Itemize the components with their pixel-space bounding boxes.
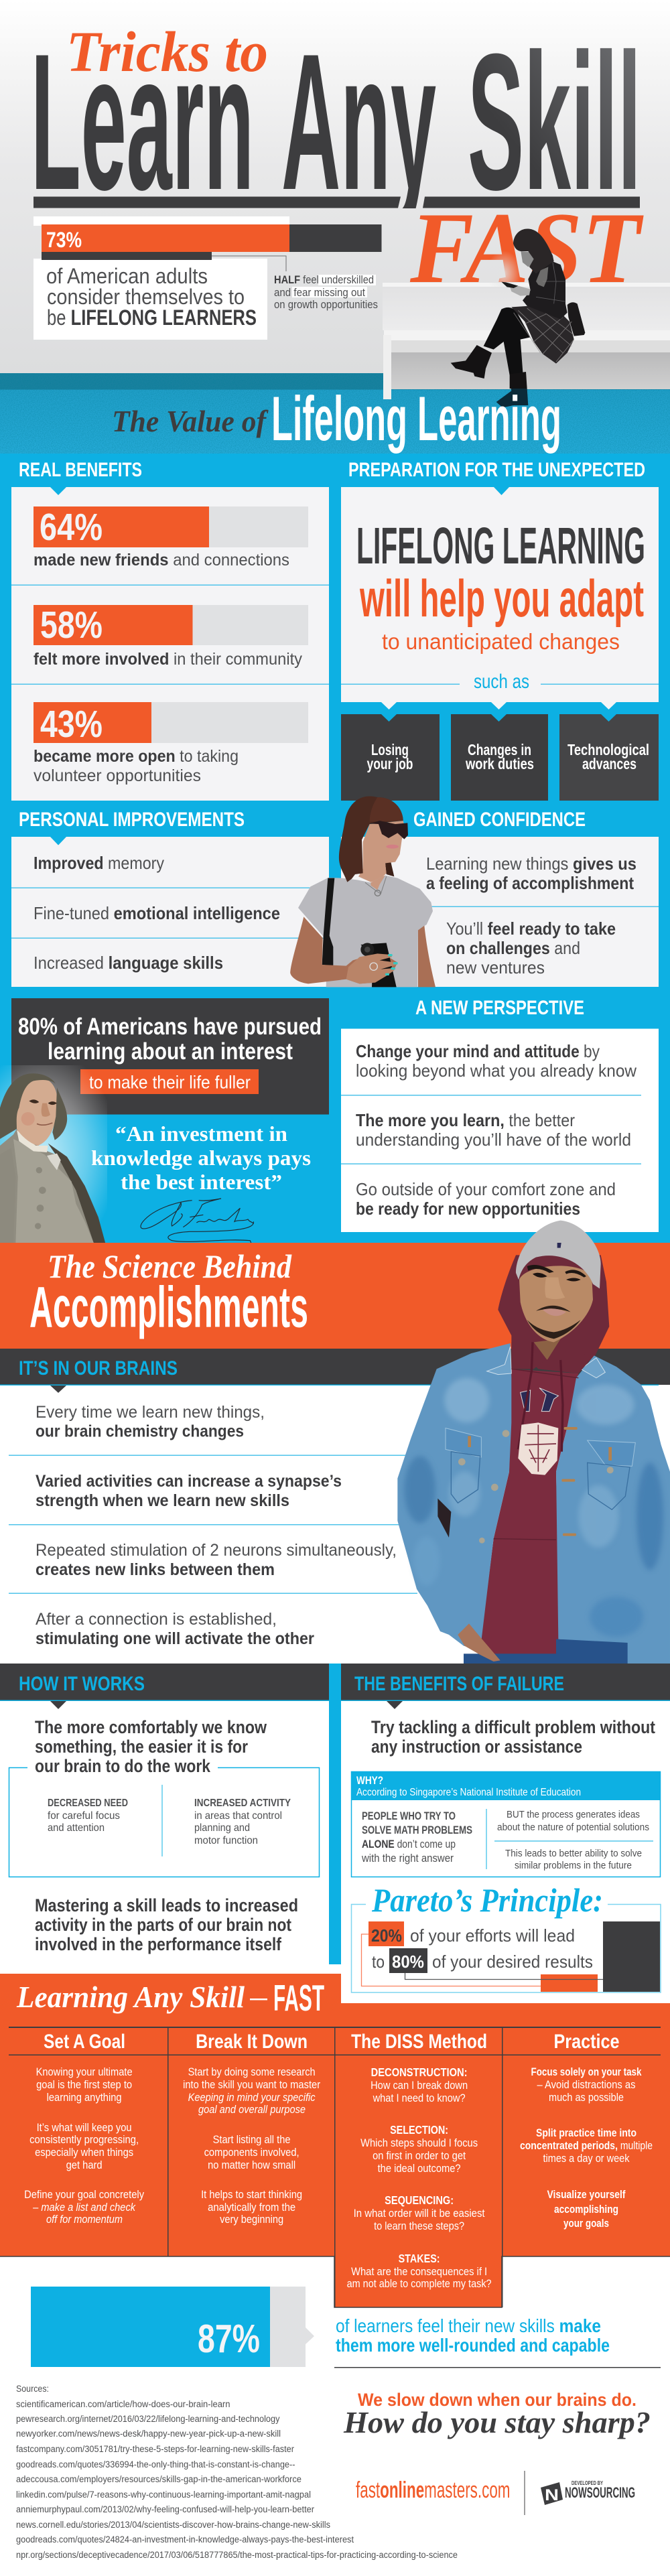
panel: decreased need and increased activity: INCREASED ACTIVITY	[194, 1798, 291, 1809]
text: Franklin quote	[91, 1122, 311, 1194]
panel: benefits of failure	[341, 1664, 670, 1992]
text: 80 percent of results	[372, 1948, 593, 1973]
column: set a goal: get hard	[66, 2159, 103, 2171]
text: 20 percent of efforts: of your efforts will lead	[410, 1925, 575, 1946]
column: practice: Split practice time into	[536, 2126, 636, 2139]
column: the DISS method: In what order will it be easiest	[354, 2207, 485, 2220]
heading: Learning Any Skill FAST: Learning Any Skill	[16, 1980, 245, 2014]
text: sources: Sources:	[16, 2383, 49, 2394]
heading: The Science Behind Accomplishments	[29, 1247, 308, 1340]
text: 80 percent of results: of your desired results	[432, 1952, 593, 1972]
column: the DISS method: SELECTION:	[390, 2123, 448, 2137]
text: comfortable knowledge: something, the easier it is for	[35, 1737, 248, 1757]
panel: why box: SOLVE MATH PROBLEMS	[362, 1824, 472, 1836]
panel: losing your job: Losing	[371, 741, 409, 758]
text: learners feel skills: of learners feel their new skills make	[336, 2315, 601, 2336]
text: 80 percent of results: to	[372, 1952, 385, 1972]
text: sources: npr.org/sections/deceptivecadence/2017/03/06/518777865/the-most-practical-tips-for-practicing-according-to-science	[16, 2550, 458, 2560]
heading: real benefits: REAL BENEFITS	[19, 459, 142, 481]
chart: 87 percent bar	[31, 2287, 314, 2367]
column: practice: Practice	[553, 2031, 619, 2053]
text: felt more involved: felt more involved in their community	[34, 650, 302, 669]
title: Learn Any Skill: Any	[281, 13, 437, 231]
panel: gained confidence: You’ll feel ready to take	[446, 919, 616, 939]
text: sources: linkedin.com/pulse/7-reasons-why-continuous-learning-important-amit-nagpal	[16, 2490, 311, 2500]
column: practice: much as possible	[549, 2091, 624, 2104]
column: break it down: Keeping in mind your specific	[188, 2091, 316, 2104]
panel: Pareto's Principle	[351, 1881, 661, 1992]
icon: NowSourcing logo	[541, 2480, 635, 2505]
text: fastonlinemasters.com: fastonlinemasters.com	[356, 2478, 511, 2503]
text: brain chemistry	[36, 1403, 265, 1441]
panel: 80 percent of Americans	[11, 998, 329, 1115]
text: lifelong learning will help you adapt: to unanticipated changes	[382, 629, 620, 654]
text: comfortable knowledge	[35, 1717, 267, 1776]
column: break it down: Start by doing some research	[188, 2065, 316, 2078]
callout: half feel underskilled	[212, 256, 378, 311]
panel: why box	[351, 1771, 661, 1877]
panel: a new perspective: Change your mind and attitude by	[356, 1041, 600, 1061]
text: mastering a skill: activity in the parts of our brain not	[35, 1915, 291, 1935]
icon: white bench	[383, 283, 670, 399]
heading: The Science Behind Accomplishments: Accomplishments	[29, 1276, 308, 1340]
panel: blue textured floor	[0, 373, 670, 454]
column: practice: times a day or week	[543, 2152, 630, 2165]
text: lifelong learning will help you adapt	[356, 517, 645, 654]
white stat box	[34, 216, 382, 340]
icon: Franklin signature	[141, 1199, 253, 1251]
column: practice	[520, 2031, 653, 2230]
heading: it's in our brains: IT’S IN OUR BRAINS	[19, 1357, 178, 1379]
icon: NowSourcing logo: DEVELOPED BY	[572, 2480, 603, 2486]
icon: young man in denim jacket and beanie	[397, 1221, 670, 1664]
column: set a goal: Knowing your ultimate	[36, 2065, 133, 2078]
panel: a new perspective: looking beyond what you already know	[356, 1061, 636, 1081]
text: neurons: Repeated stimulation of 2 neurons simultaneously,	[36, 1541, 397, 1560]
column: break it down: components involved,	[204, 2146, 299, 2159]
icon: woman in sunglasses	[290, 797, 436, 987]
bar: 64 percent	[34, 506, 308, 549]
panel: decreased need and increased activity	[9, 1767, 319, 1877]
panel: 80 percent of Americans: learning about an interest	[48, 1038, 293, 1065]
panel: it's in our brains	[0, 1349, 670, 1648]
column: practice: Visualize yourself	[547, 2188, 626, 2201]
text: connection	[36, 1610, 314, 1648]
icon: NowSourcing logo: N	[545, 2486, 559, 2504]
panel: personal improvements: Increased language skills	[34, 953, 223, 973]
panel: personal improvements	[11, 837, 329, 987]
bar: 58 percent: 58%	[40, 604, 103, 647]
panel: a new perspective: understanding you’ll have of the world	[356, 1130, 631, 1150]
text: sources: pewresearch.org/internet/2016/03/22/lifelong-learning-and-technology	[16, 2414, 280, 2424]
column: set a goal: off for momentum	[46, 2213, 123, 2226]
panel: why box: with the right answer	[361, 1852, 454, 1865]
panel: why box: WHY?	[356, 1774, 383, 1787]
bar: 58 percent	[34, 604, 308, 647]
callout: to make their life fuller: to make their life fuller	[89, 1072, 251, 1092]
text: comfortable knowledge: our brain to do the work	[35, 1756, 211, 1776]
column: the DISS method	[347, 2031, 492, 2290]
panel: gained confidence	[341, 837, 659, 987]
column: the DISS method: STAKES:	[399, 2252, 440, 2265]
column: practice: – Avoid distractions as	[537, 2078, 635, 2091]
text: made new friends: made new friends and connections	[34, 551, 289, 569]
panel: changes in work duties	[451, 702, 548, 801]
text: lifelong learners stat: be LIFELONG LEARNERS	[47, 306, 257, 330]
text: Franklin quote: the best interest”	[121, 1170, 282, 1194]
heading: the benefits of failure: THE BENEFITS OF FAILURE	[354, 1673, 564, 1695]
text: 20 percent of efforts: 20%	[371, 1925, 402, 1946]
text: lifelong learners stat: of American adults	[46, 264, 208, 288]
panel: why box: PEOPLE WHO TRY TO	[362, 1810, 456, 1822]
callout: half feel underskilled: and fear missing out	[274, 287, 365, 299]
column: the DISS method: SEQUENCING:	[385, 2193, 454, 2207]
title: Learn Any Skill: Learn	[31, 13, 254, 230]
column: the DISS method: the ideal outcome?	[378, 2162, 461, 2175]
column: the DISS method: DECONSTRUCTION:	[371, 2065, 468, 2079]
column: practice: your goals	[563, 2217, 609, 2230]
heading: Learning Any Skill FAST	[16, 1977, 324, 2019]
column: set a goal	[24, 2031, 145, 2226]
heading: The Value of Lifelong Learning: Lifelong	[271, 383, 407, 454]
heading: how it works: HOW IT WORKS	[19, 1673, 145, 1695]
column: break it down: Break It Down	[196, 2031, 308, 2053]
heading: a new perspective: A NEW PERSPECTIVE	[415, 997, 584, 1019]
column: break it down: It helps to start thinking	[201, 2188, 302, 2201]
text: sources: fastcompany.com/3051781/try-these-5-steps-for-learning-new-skills-faster	[16, 2444, 294, 2454]
panel: why box: This leads to better ability to solve	[505, 1848, 642, 1859]
text: brain chemistry: Every time we learn new things,	[36, 1403, 265, 1422]
panel: losing your job: your job	[367, 755, 413, 772]
text: sources: goodreads.com/quotes/24824-an-investment-in-knowledge-always-pays-the-best-interest	[16, 2534, 354, 2545]
heading: Learning Any Skill FAST: FAST	[273, 1977, 324, 2019]
column: practice: concentrated periods, multiple	[520, 2139, 653, 2152]
column: the DISS method: to learn these steps?	[374, 2220, 464, 2232]
panel: a new perspective: Go outside of your comfort zone and	[356, 1179, 616, 1199]
panel: gained confidence: a feeling of accomplishment	[426, 873, 634, 893]
panel: gained confidence: new ventures	[446, 957, 545, 977]
column: the DISS method: Which steps should I focus	[360, 2137, 478, 2149]
text: synapse strength: Varied activities can increase a synapse’s	[36, 1472, 342, 1491]
text: sources: scientificamerican.com/article/how-does-our-brain-learn	[16, 2399, 230, 2409]
bar: 64 percent: 64%	[40, 506, 103, 549]
panel: learning any skill fast	[0, 1974, 670, 2307]
text: synapse strength	[36, 1472, 342, 1510]
text: sources: adeccousa.com/employers/resources/skills-gap-in-the-american-workforce	[16, 2474, 302, 2484]
bar: 73 percent	[42, 224, 382, 260]
column: break it down: no matter how small	[208, 2159, 295, 2171]
panel: gained confidence: Learning new things gives us	[426, 854, 636, 874]
panel: why box: BUT the process generates ideas	[507, 1810, 640, 1820]
heading: gained confidence: GAINED CONFIDENCE	[413, 809, 586, 831]
panel: technological advances	[559, 702, 659, 801]
column: break it down	[183, 2031, 320, 2226]
blue vertical divider	[329, 1664, 341, 1964]
panel: decreased need and increased activity: DECREASED NEED	[48, 1798, 128, 1809]
callout: half feel underskilled: on growth opportunities	[274, 299, 378, 311]
column: break it down: analytically from the	[208, 2201, 295, 2214]
text: lifelong learners stat: consider themselves to	[47, 285, 245, 309]
panel: decreased need and increased activity: in areas that control	[194, 1810, 282, 1822]
text: sources: goodreads.com/quotes/336994-the-only-thing-that-is-constant-is-change--	[16, 2459, 295, 2469]
text: became more open: became more open to taking	[34, 747, 239, 766]
column: the DISS method: How can I break down	[371, 2079, 468, 2092]
panel: hero wall background	[0, 0, 670, 373]
text: became more open: volunteer opportunities	[34, 766, 201, 785]
panel: decreased need and increased activity: and attention	[48, 1822, 105, 1834]
title: FAST: FAST	[409, 192, 644, 304]
panel: changes in work duties: Changes in	[468, 741, 531, 758]
column: practice: Focus solely on your task	[531, 2065, 642, 2078]
text: sources: newyorker.com/news/news-desk/happy-new-year-pick-up-a-new-skill	[16, 2429, 281, 2439]
column: the DISS method: The DISS Method	[351, 2031, 487, 2053]
panel: losing your job	[341, 702, 440, 801]
icon: Benjamin Franklin portrait	[0, 1065, 107, 1243]
panel: personal improvements: Fine-tuned emotional intelligence	[34, 903, 280, 923]
column: set a goal: consistently progressing,	[29, 2133, 139, 2146]
title: Tricks to: Tricks to	[66, 19, 268, 84]
panel: a new perspective: be ready for new opportunities	[356, 1199, 580, 1219]
heading: The Value of Lifelong Learning: The Value of	[112, 404, 269, 438]
panel: changes in work duties: work duties	[465, 755, 534, 772]
panel: blue lifelong learning section	[0, 454, 670, 1243]
panel: gained confidence: on challenges and	[446, 938, 580, 958]
text: mastering a skill: involved in the performance itself	[35, 1934, 282, 1954]
text: such as: such as	[474, 671, 529, 693]
text: Franklin quote: knowledge always pays	[91, 1146, 311, 1170]
text: closing question: We slow down when our brains do.	[358, 2390, 636, 2410]
text: became more open	[34, 747, 239, 785]
panel: why box: According to Singapore’s National Institute of Education	[356, 1787, 581, 1798]
heading: personal improvements: PERSONAL IMPROVEMENTS	[19, 809, 245, 831]
panel: technological advances: advances	[582, 755, 636, 772]
panel: why box: ALONE don’t come up	[362, 1838, 456, 1850]
text: closing question	[343, 2390, 651, 2439]
panel: personal improvements: Improved memory	[34, 853, 164, 873]
text: learners feel skills: them more well-rounded and capable	[336, 2335, 610, 2356]
panel: preparation for the unexpected	[341, 487, 659, 702]
column: set a goal: learning anything	[47, 2091, 122, 2104]
text: learners feel skills	[336, 2315, 610, 2356]
text: try tackling: any instruction or assistance	[371, 1737, 582, 1757]
column: set a goal: It’s what will keep you	[37, 2121, 132, 2134]
panel: decreased need and increased activity: for careful focus	[48, 1810, 120, 1822]
panel: real benefits	[11, 487, 329, 801]
title underline bar	[34, 197, 640, 208]
text: synapse strength: strength when we learn new skills	[36, 1491, 289, 1510]
chart: 87 percent bar: 87%	[198, 2317, 260, 2361]
panel: how it works	[0, 1664, 329, 1954]
bar: 43 percent	[34, 702, 308, 746]
callout: half feel underskilled: HALF feel underskilled	[274, 274, 374, 286]
panel: a new perspective: The more you learn, the better	[356, 1110, 575, 1130]
panel: why box: about the nature of potential solutions	[497, 1822, 649, 1833]
column: practice: accomplishing	[554, 2203, 618, 2216]
bar: 73 percent: 73%	[46, 228, 82, 252]
text: sources	[16, 2383, 458, 2560]
title: Learn Any Skill	[36, 48, 635, 208]
bar: 43 percent: 43%	[40, 703, 103, 746]
text: sources: anniemurphypaul.com/2013/02/why-feeling-confused-will-help-you-learn-better	[16, 2504, 314, 2514]
text: comfortable knowledge: The more comfortably we know	[35, 1717, 267, 1737]
panel: why box: similar problems in the future	[515, 1860, 632, 1871]
column: the DISS method: on first in order to get	[373, 2149, 466, 2162]
text: neurons: creates new links between them	[36, 1560, 275, 1579]
column: break it down: very beginning	[220, 2213, 283, 2226]
column: break it down: Start listing all the	[213, 2133, 291, 2146]
text: mastering a skill	[35, 1895, 298, 1954]
heading: The Value of Lifelong Learning	[112, 383, 561, 454]
panel: a new perspective	[341, 1029, 659, 1232]
panel: science heading band	[0, 1243, 670, 1349]
decorative fade	[486, 251, 521, 296]
heading: Pareto's Principle: Pareto’s Principle:	[371, 1881, 603, 1919]
panel: decreased need and increased activity: motor function	[194, 1835, 258, 1846]
column: set a goal: Set A Goal	[44, 2031, 125, 2053]
text: brain chemistry: our brain chemistry changes	[36, 1422, 244, 1441]
text: try tackling	[371, 1717, 655, 1757]
column: set a goal: especially when things	[35, 2146, 133, 2159]
text: connection: After a connection is established,	[36, 1610, 277, 1629]
panel: 80 percent of Americans: 80% of Americans have pursued	[18, 1014, 322, 1040]
column: break it down: into the skill you want to master	[183, 2078, 320, 2091]
text: 20 percent of efforts	[368, 1921, 575, 1946]
column: set a goal: goal is the first step to	[36, 2078, 132, 2091]
text: lifelong learners stat	[46, 264, 257, 330]
column: the DISS method: am not able to complete my task?	[347, 2277, 492, 2290]
column: set a goal: – make a list and check	[33, 2201, 136, 2214]
icon: woman sitting on bench with phone	[451, 228, 585, 407]
text: closing question: How do you stay sharp?	[343, 2405, 651, 2439]
text: 80 percent of results: 80%	[392, 1952, 424, 1972]
text: connection: stimulating one will activate the other	[36, 1629, 314, 1648]
text: neurons	[36, 1541, 397, 1579]
column: set a goal: Define your goal concretely	[24, 2188, 145, 2201]
column: the DISS method: what I need to know?	[373, 2092, 466, 2104]
text: sources: news.cornell.edu/stories/2013/04/scientists-discover-how-brains-change-new-skills	[16, 2520, 330, 2530]
column: the DISS method: What are the consequences if I	[351, 2265, 487, 2278]
text: mastering a skill: Mastering a skill leads to increased	[35, 1895, 298, 1915]
panel: technological advances: Technological	[567, 741, 649, 758]
panel: decreased need and increased activity: planning and	[194, 1822, 250, 1834]
column: break it down: goal and overall purpose	[198, 2103, 306, 2116]
text: Franklin quote: “An investment in	[115, 1122, 287, 1146]
heading: The Science Behind Accomplishments: The Science Behind	[48, 1247, 292, 1285]
chart: 20 and 80 percent blocks	[362, 1921, 660, 1992]
